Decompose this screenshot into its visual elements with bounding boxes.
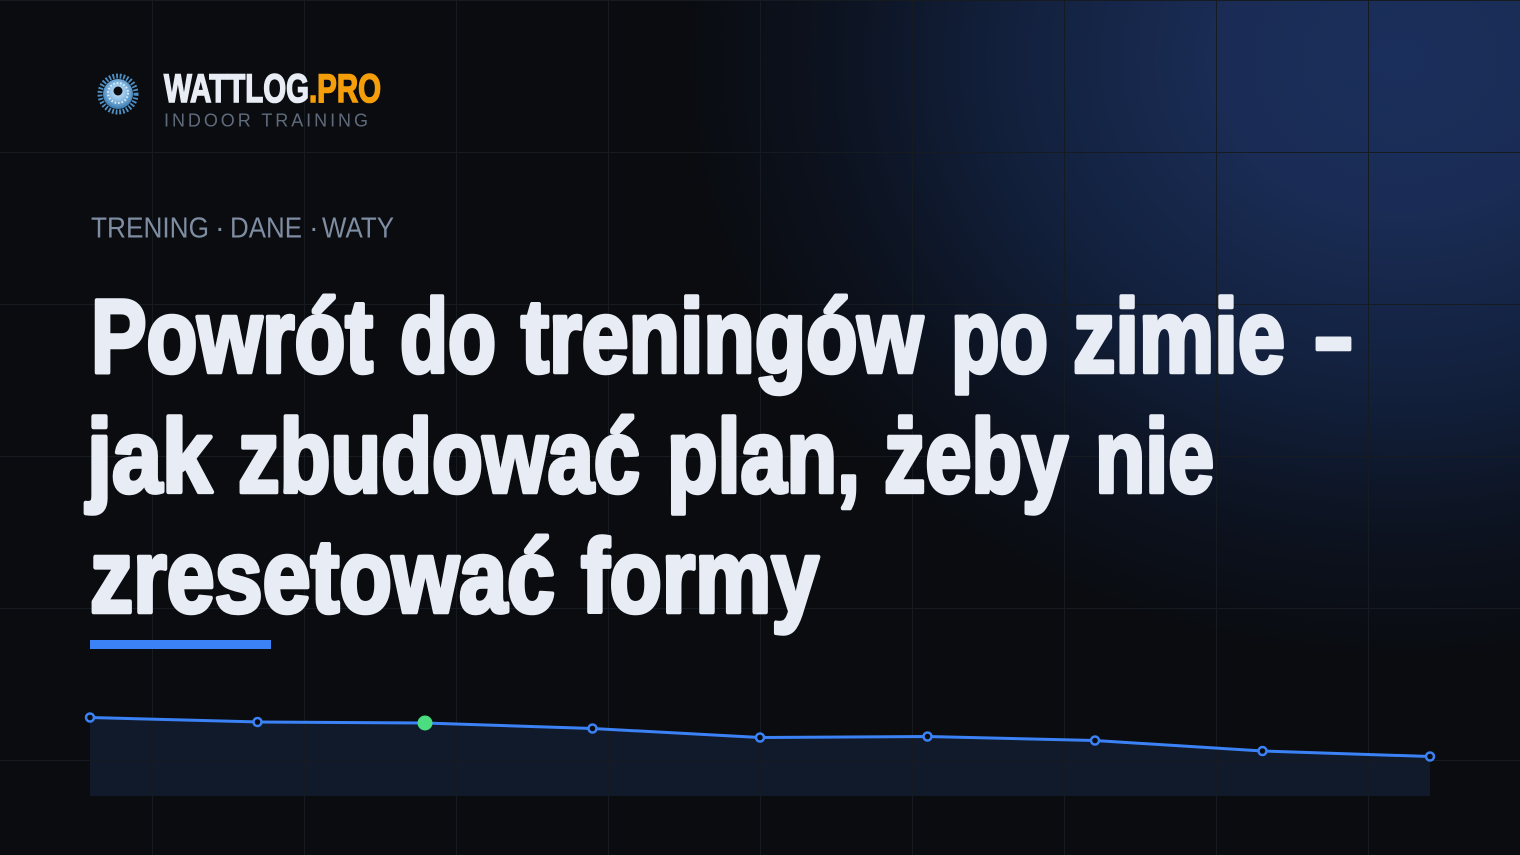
chart line: [90, 718, 1430, 756]
title: –: [1315, 279, 1352, 395]
title: żeby: [884, 399, 1068, 515]
eyebrow: ·: [215, 212, 225, 244]
brand tagline: INDOOR TRAINING: [164, 110, 368, 130]
icon: cassette gear: [100, 76, 136, 112]
title: jak: [85, 399, 212, 515]
title: zresetować: [90, 519, 555, 635]
chart data points: [86, 714, 1434, 760]
title: formy: [581, 519, 819, 635]
title: do: [400, 279, 496, 395]
title: Powrót: [91, 279, 373, 395]
eyebrow: [91, 212, 394, 244]
chart area fill: [90, 718, 1430, 796]
eyebrow: TRENING: [91, 212, 209, 244]
title: zimie: [1073, 279, 1285, 395]
title: treningów: [521, 279, 924, 395]
title: po: [951, 279, 1048, 395]
line chart: [86, 714, 1434, 760]
title accent underline: [90, 640, 271, 649]
title: [85, 279, 1352, 635]
brand name: WATTLOG.PRO: [164, 67, 381, 111]
title: plan,: [667, 399, 860, 515]
eyebrow: DANE: [230, 212, 302, 244]
eyebrow: ·: [309, 212, 319, 244]
eyebrow: WATY: [322, 212, 394, 244]
logo: [100, 67, 381, 130]
highlighted data point: [418, 716, 432, 730]
title: nie: [1095, 399, 1214, 515]
title: zbudować: [238, 399, 640, 515]
